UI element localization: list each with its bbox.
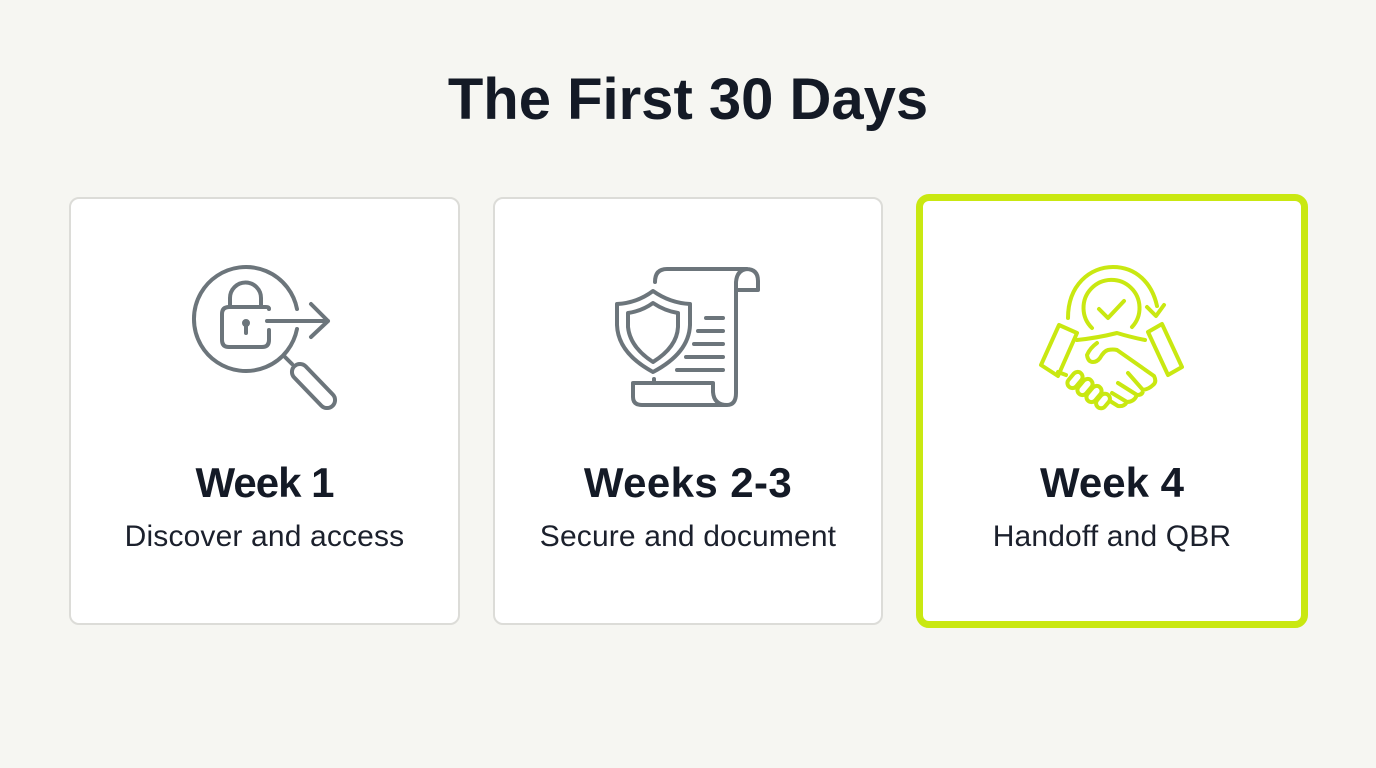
panel: week 4 highlighted — [916, 194, 1308, 628]
text: week 1 description: Discover and access — [125, 520, 404, 553]
title: The First 30 Days — [448, 67, 928, 132]
panel: weeks 2-3 — [493, 197, 883, 625]
panel: week 1 — [69, 197, 460, 625]
heading: weeks 2-3: Weeks 2-3 — [584, 459, 792, 506]
text: week 4 description: Handoff and QBR — [993, 520, 1231, 553]
heading: week 4: Week 4 — [1040, 459, 1184, 506]
text: weeks 2-3 description: Secure and document — [540, 520, 836, 553]
heading: week 1: Week 1 — [196, 459, 334, 506]
